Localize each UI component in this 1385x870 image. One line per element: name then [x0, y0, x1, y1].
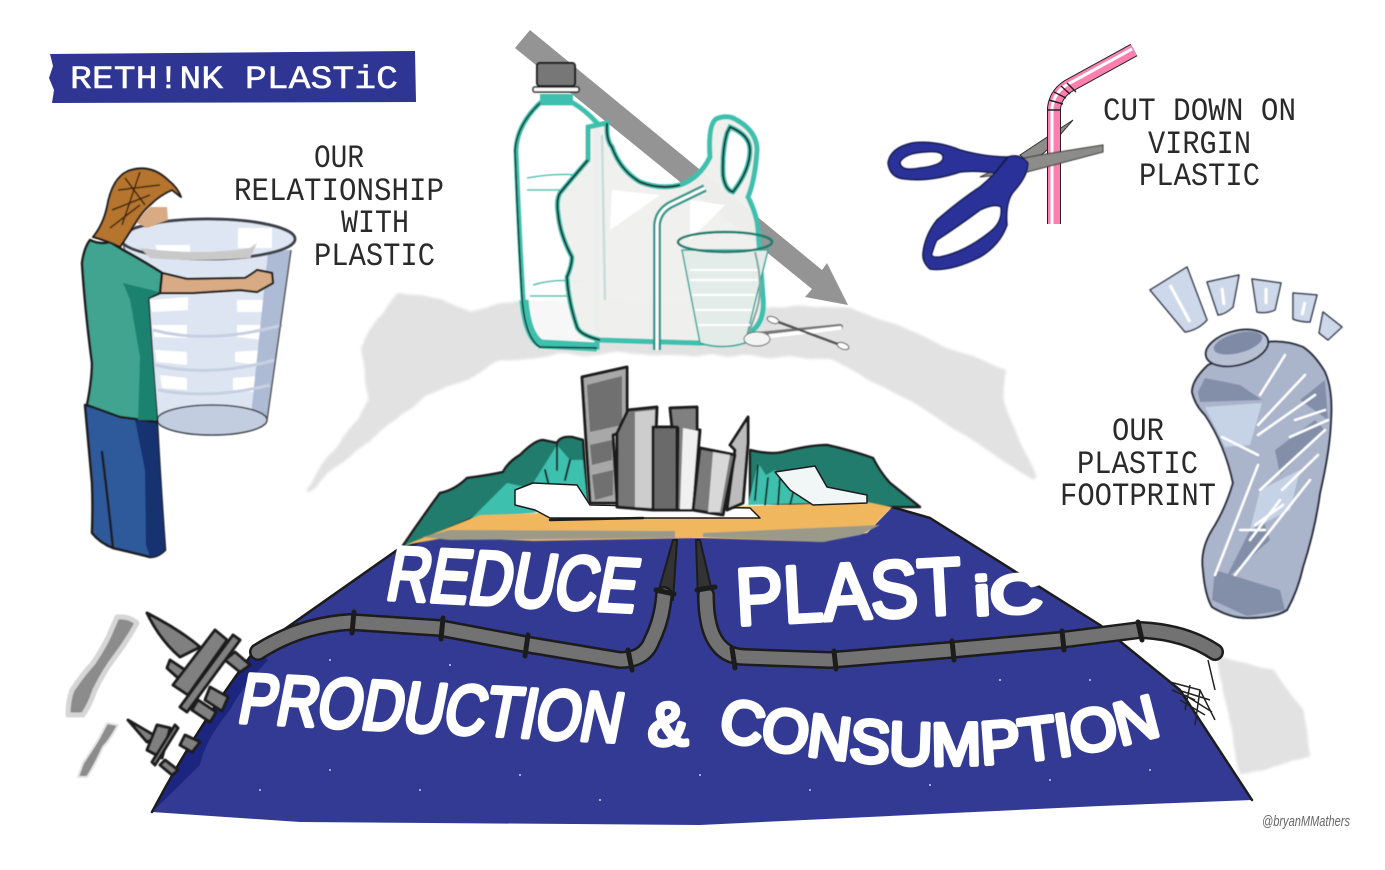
label: our plastic footprint: FOOTPRINT — [1060, 478, 1216, 515]
crushed bottle — [1192, 323, 1331, 618]
sea sparkle — [259, 659, 1151, 801]
ocean outline — [152, 507, 1252, 812]
label: our relationship with plastic: OUR — [314, 140, 364, 177]
right pipeline — [696, 540, 1215, 669]
label: cut down on virgin plastic: PLASTIC — [1139, 158, 1260, 195]
person arm — [160, 270, 273, 293]
plastic carrier bag — [557, 117, 763, 343]
title banner — [49, 51, 416, 103]
ghost net at pipe end — [1170, 660, 1215, 725]
pink bendy straw — [1047, 49, 1134, 224]
plastic cup — [678, 232, 772, 346]
label: our plastic footprint — [1060, 413, 1216, 515]
person hugging the cup — [82, 168, 273, 557]
grey downward arrow — [515, 30, 848, 305]
label: our relationship with plastic — [234, 140, 444, 275]
scissors — [888, 142, 1103, 270]
headline: ampersand: & — [648, 691, 688, 758]
label: our relationship with plastic: WITH — [341, 205, 409, 242]
title banner: RETH!NK PLASTiC — [70, 61, 398, 98]
oil rig smoke small — [78, 723, 118, 777]
grey smoke cloud arc — [308, 297, 1033, 488]
oil rig smoke large — [68, 617, 137, 715]
headline: reduce: REDUCE — [381, 532, 647, 629]
label: cut down on virgin plastic: CUT DOWN ON — [1103, 93, 1296, 130]
left pipeline — [258, 540, 677, 670]
headline: plastic: PLAST — [733, 541, 964, 642]
single-use plastics group — [515, 63, 850, 351]
giant plastic cup hugged by person — [121, 219, 295, 435]
scissor lower handle — [923, 156, 1028, 270]
label: our relationship with plastic: RELATIONSHIP — [234, 173, 444, 210]
right green hill — [748, 445, 920, 507]
scissor upper blade — [1020, 120, 1073, 165]
label: our plastic footprint: OUR — [1112, 413, 1164, 450]
island mound of ocean — [150, 364, 1254, 825]
footprint of crushed bottle and cups — [1150, 267, 1342, 618]
label: cut down on virgin plastic — [1103, 93, 1296, 195]
white buildings and shoreline — [515, 466, 867, 520]
person shirt — [82, 240, 162, 422]
scissor lower blade — [980, 145, 1103, 177]
spoon and cotton buds — [744, 315, 850, 351]
plastic bottle — [515, 63, 597, 348]
beach — [405, 502, 892, 545]
left green hill — [400, 437, 587, 550]
artist signature: @bryanMMathers — [1262, 813, 1350, 830]
label: our relationship with plastic: PLASTIC — [314, 238, 435, 275]
city skyline — [582, 367, 748, 515]
person hair and face — [93, 168, 181, 247]
drinking straw — [657, 188, 705, 350]
label: our plastic footprint: PLASTIC — [1077, 446, 1198, 483]
grey smoke cloud right — [1222, 662, 1309, 770]
ocean mound — [152, 507, 1252, 825]
headline: plastic: iC — [972, 564, 1044, 627]
oil rig small — [128, 720, 200, 775]
headline: consumption: CONSUMPTION — [722, 694, 1160, 768]
label: cut down on virgin plastic: VIRGIN — [1148, 126, 1251, 163]
toe cups — [1150, 267, 1342, 340]
headline: production: PRODUCTION — [233, 659, 631, 757]
scissor upper handle — [888, 142, 1007, 180]
oil rig large — [147, 613, 250, 722]
person trousers — [85, 405, 165, 557]
ocean shaded edge — [152, 650, 268, 812]
